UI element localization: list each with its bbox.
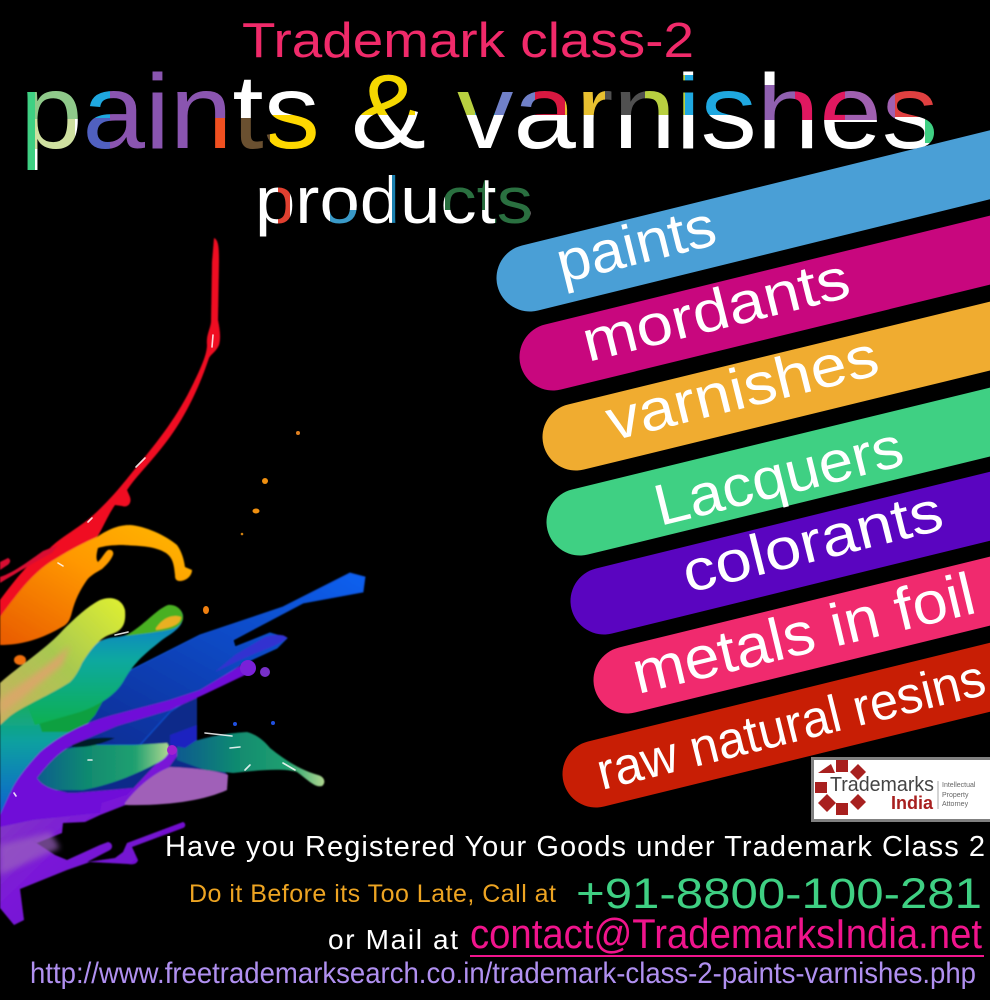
title: Trademark class-2: Trademark class-2 (242, 14, 694, 68)
paint: left green and teal (0, 693, 85, 815)
label: colorants: colorants (675, 478, 949, 606)
paint: orange drop (14, 655, 26, 665)
logo tagline: Attorney (942, 801, 969, 808)
paint: purple lower mass (0, 746, 185, 925)
bar: paints (530, 148, 990, 296)
paint: green mid band (30, 688, 110, 732)
paint: green yellow tip (125, 605, 183, 636)
paint: purple soft centre (0, 832, 60, 875)
label: paints: paints (549, 193, 722, 296)
bar: metals in foil (625, 560, 990, 707)
paint: red drip (0, 545, 58, 583)
bar: raw natural resins (591, 649, 990, 802)
logo tagline: Intellectual (942, 782, 976, 789)
text: or Mail at: or Mail at (328, 924, 458, 955)
heading: products: products (255, 163, 533, 237)
paint: purple blue tail (215, 635, 287, 672)
bar: Lacquers (580, 405, 990, 539)
logo icon: red diamonds (815, 760, 866, 815)
text: registration question: Have you Registered Your Goods under Trademark Class 2 (165, 831, 985, 863)
label: mordants: mordants (575, 245, 856, 375)
logo tagline: Property (942, 792, 969, 799)
text: phone number: +91-8800-100-281 (576, 870, 982, 918)
paint: purple arm (10, 666, 245, 797)
label: Lacquers: Lacquers (647, 414, 910, 539)
paint: glossy green blob (177, 732, 324, 786)
bar: mordants (553, 233, 990, 375)
paint: highlights (14, 335, 295, 796)
paint: dark underlay (0, 665, 228, 830)
paint: yellow tip band (156, 616, 181, 630)
paint: purple bridge (0, 788, 133, 830)
paint: dark window (72, 738, 115, 747)
logo wordmark: Trademarks: Trademarks (830, 774, 934, 796)
email underline (470, 955, 984, 957)
paint: blue lower right (170, 725, 197, 748)
illustration: rainbow paint splash (0, 238, 365, 925)
paint: yellow-green soft centre (0, 645, 70, 715)
paint: left gloss pool (33, 743, 169, 790)
paint: blue streak (60, 573, 365, 745)
paint: red strand (0, 238, 220, 618)
logo wordmark: India: India (891, 793, 934, 813)
logo: Trademarks India (812, 758, 990, 820)
logo divider (938, 781, 939, 809)
heading: paints & varnishes: paints & varnishes (20, 53, 938, 171)
paint: violet sheen (125, 767, 228, 805)
paint: orange splash (0, 525, 192, 645)
label: varnishes: varnishes (599, 323, 885, 454)
text: call to action: Do it Before its Too Late, Call at (189, 880, 556, 908)
label: metals in foil: metals in foil (625, 560, 981, 707)
paint: droplets (167, 431, 300, 755)
paint: blue teal splash (25, 606, 183, 725)
paint: yellow-green splash (0, 598, 125, 725)
bar: varnishes (576, 319, 990, 454)
bar: colorants (604, 478, 990, 606)
